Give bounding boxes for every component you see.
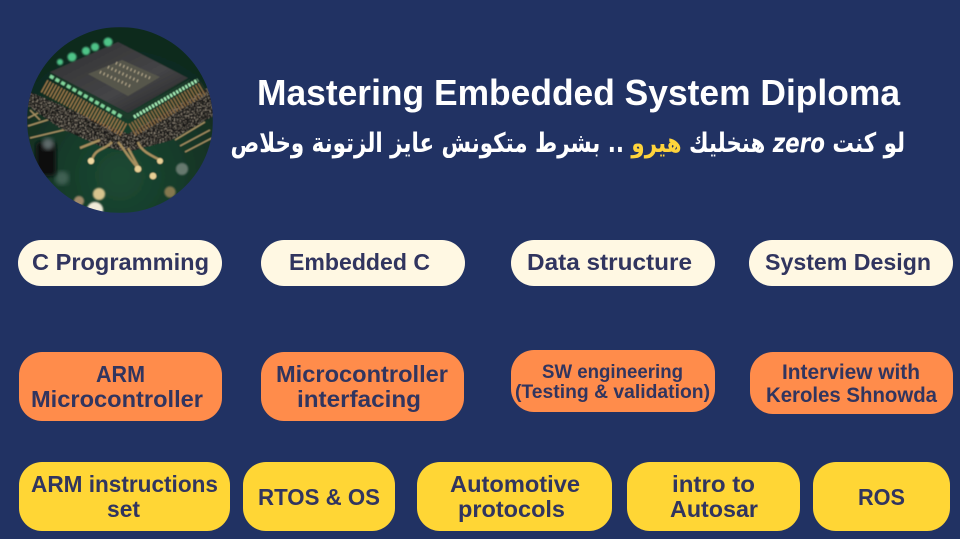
pill: Interview with Keroles Shnowda: Interview with (782, 361, 920, 384)
pill: ARM Microcontroller: ARM (96, 361, 145, 387)
pill: C Programming (18, 240, 222, 286)
pill: intro to Autosar (627, 462, 800, 531)
circuit traces left (27, 108, 66, 140)
pill: System Design: System Design (765, 249, 931, 275)
pill: Embedded C: Embedded C (289, 249, 430, 275)
pill: ARM Microcontroller (19, 352, 222, 421)
pill: intro to Autosar: Autosar (670, 496, 758, 522)
pill: SW engineering: (Testing & validation) (515, 382, 710, 403)
pill: Microcontroller interfacing: interfacing (297, 386, 421, 412)
pill: Embedded C (261, 240, 465, 286)
chip die speckle (88, 60, 160, 96)
icon: circular microchip photo (27, 27, 213, 218)
pill: System Design (749, 240, 953, 286)
pill: Data structure: Data structure (527, 249, 692, 275)
pill: ARM Microcontroller: Microcontroller (31, 386, 203, 412)
pill: SW engineering: SW engineering (542, 362, 683, 383)
pill: ARM instructions set: set (107, 496, 140, 522)
title: Mastering Embedded System Diploma (257, 72, 901, 113)
arabic subtitle: لو كنت zero هنخليك هيرو .. بشرط متكونش عايز الزتونة وخلاص (231, 127, 905, 159)
pill: RTOS & OS (243, 462, 395, 531)
pill: ROS (813, 462, 950, 531)
pill: Data structure (511, 240, 715, 286)
pill: Microcontroller interfacing: Microcontroller (276, 361, 448, 387)
pill: ARM instructions set: ARM instructions (31, 471, 218, 497)
solder debris band (28, 85, 213, 152)
chip pins (44, 86, 124, 130)
gold traces and pads (80, 140, 160, 170)
pill: ROS: ROS (858, 484, 905, 510)
chip top (50, 42, 188, 113)
chip underside (50, 73, 190, 112)
green LEDs (50, 76, 122, 117)
pill: C Programming: C Programming (32, 249, 209, 275)
pill: Automotive protocols (417, 462, 612, 531)
top LEDs (57, 38, 112, 65)
pill: Interview with Keroles Shnowda (750, 352, 953, 414)
pill: Automotive protocols: Automotive (450, 471, 580, 497)
pill: intro to Autosar: intro to (672, 471, 755, 497)
pill: ARM instructions set (19, 462, 230, 531)
pill: Automotive protocols: protocols (458, 496, 565, 522)
bokeh (93, 188, 105, 200)
pill: SW engineering (511, 350, 715, 412)
pill: Microcontroller interfacing (261, 352, 464, 421)
pill: Interview with Keroles Shnowda: Keroles Shnowda (766, 384, 937, 407)
circuit traces right (175, 122, 212, 152)
pill: RTOS & OS: RTOS & OS (258, 484, 380, 510)
